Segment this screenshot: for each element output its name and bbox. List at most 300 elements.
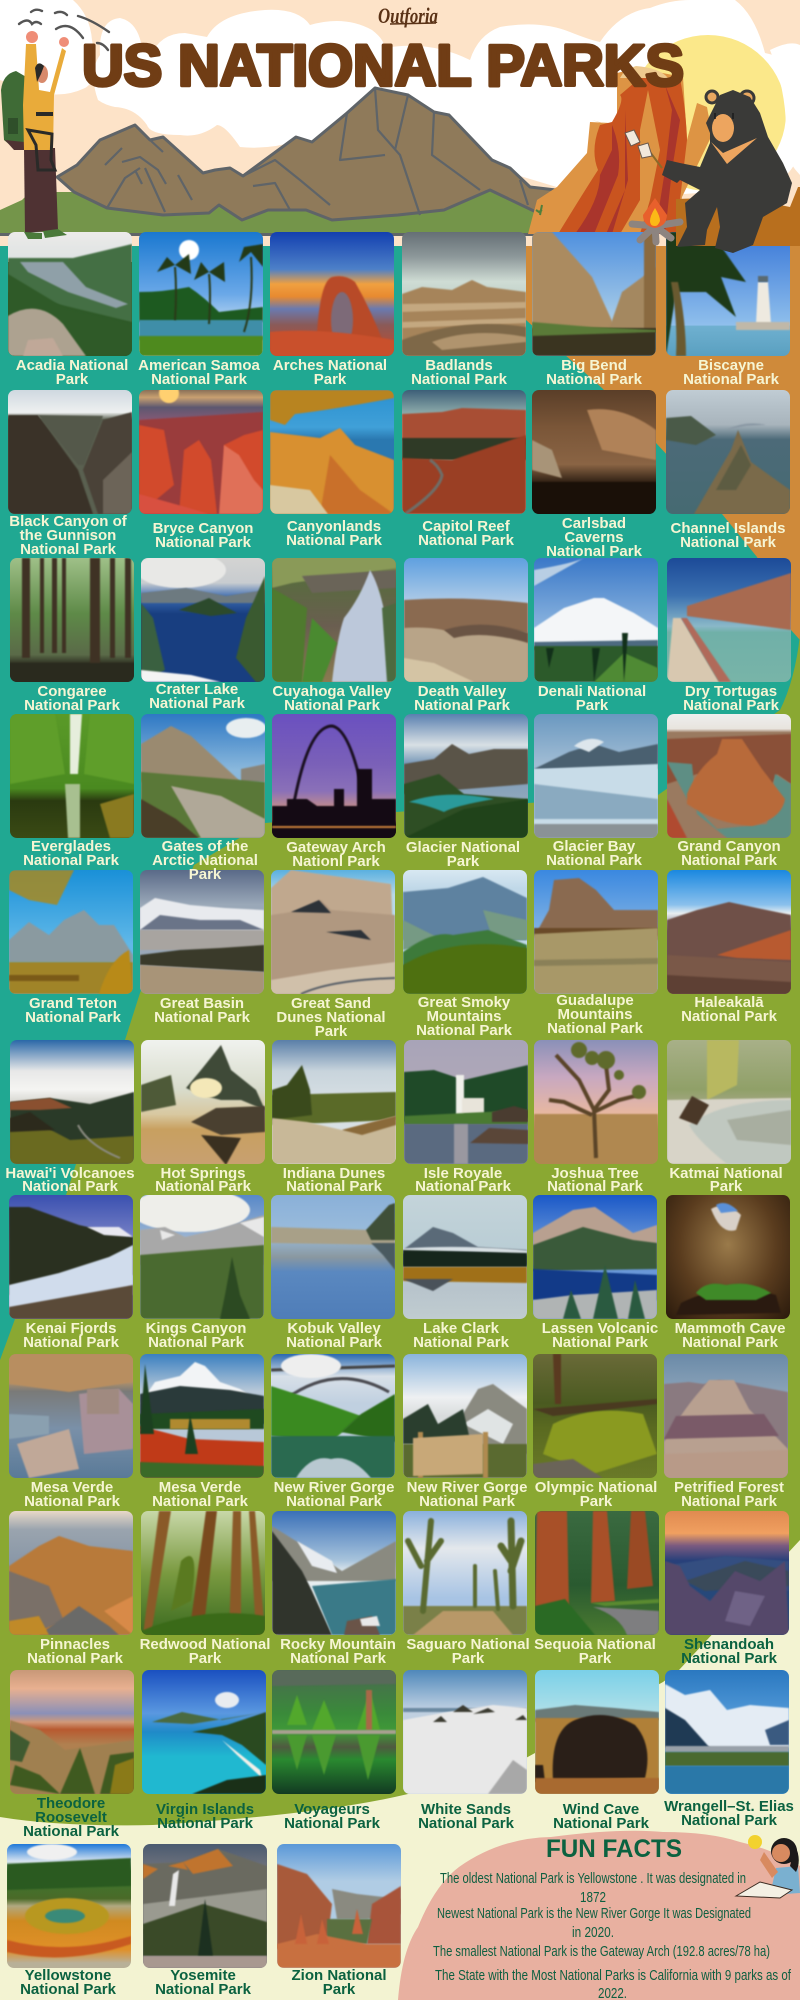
- card: Gates of the Arctic National Park: [141, 714, 265, 883]
- card: Pinnacles National Park: [9, 1511, 133, 1663]
- photo: Kenai Fjords: [9, 1195, 133, 1319]
- name: Gateway Arch: [286, 839, 386, 856]
- name: Park: [189, 866, 221, 883]
- bear log: [676, 187, 800, 246]
- card: Glacier National Park: [404, 714, 528, 866]
- name: [273, 357, 387, 388]
- bear: [662, 90, 792, 253]
- name: Capitol Reef: [422, 518, 510, 535]
- photo: Grand Teton: [9, 870, 133, 994]
- name: [510, 1638, 680, 1666]
- photo: Congaree: [10, 558, 134, 682]
- card: Hot Springs National Park: [141, 1040, 265, 1192]
- photo: Arches: [270, 232, 394, 356]
- name: New River Gorge: [407, 1479, 527, 1496]
- photo: Mesa Verde peak: [140, 1354, 264, 1478]
- name: Theodore: [37, 1795, 105, 1812]
- card: Kings Canyon National Park: [140, 1195, 264, 1347]
- name: Guadalupe: [556, 992, 634, 1009]
- name: National Park: [284, 697, 380, 714]
- name: National Park: [157, 1815, 253, 1832]
- name: National Park: [20, 1981, 116, 1998]
- card: Big Bend National Park: [532, 232, 656, 388]
- name: Katmai National: [669, 1165, 783, 1182]
- card: Denali National Park: [534, 558, 658, 714]
- name: [378, 841, 548, 869]
- name: Acadia National: [16, 357, 128, 374]
- name: National Park: [155, 534, 251, 551]
- name: National Park: [681, 1493, 777, 1510]
- name: Wind Cave: [563, 1801, 639, 1818]
- photo: Wind Cave: [535, 1670, 659, 1794]
- photo: Kings Canyon: [140, 1195, 264, 1319]
- name: Isle Royale: [424, 1165, 502, 1182]
- name: [24, 683, 120, 714]
- name: [418, 518, 514, 549]
- name: [414, 683, 510, 714]
- name: American Samoa: [138, 357, 260, 374]
- photo: Big Bend: [532, 232, 656, 356]
- photo: Hawaii Volcanoes: [10, 1040, 134, 1164]
- name: National Park: [149, 695, 245, 712]
- card: Voyageurs National Park: [272, 1670, 396, 1822]
- photo: Indiana Dunes: [272, 1040, 396, 1164]
- name: Sequoia National: [534, 1636, 656, 1653]
- name: National Park: [154, 1009, 250, 1026]
- title: US NATIONAL PARKS: [82, 34, 684, 98]
- name: [546, 515, 642, 560]
- photo: Katmai: [667, 1040, 791, 1164]
- photo: Haleakala: [667, 870, 791, 994]
- photo: Capitol Reef: [402, 390, 526, 514]
- name: [411, 357, 507, 388]
- name: [115, 1481, 285, 1509]
- name: [378, 1167, 548, 1193]
- photo: Great Sand Dunes: [271, 870, 395, 994]
- name: Arctic National: [152, 852, 258, 869]
- card: Capitol Reef National Park: [402, 390, 526, 549]
- name: [16, 357, 128, 388]
- card: Bryce Canyon National Park: [139, 390, 263, 551]
- card: Rocky Mountain National Park: [272, 1511, 396, 1663]
- name: Glacier National: [406, 839, 520, 856]
- name: National Park: [416, 1022, 512, 1039]
- photo: Carlsbad: [532, 390, 656, 514]
- photo: Great Smoky: [403, 870, 527, 994]
- sun: [630, 35, 786, 191]
- card: Mesa Verde National Park (1): [9, 1354, 133, 1506]
- card: Haleakala National Park: [667, 870, 791, 1022]
- card: Carlsbad Caverns National Park: [532, 390, 656, 560]
- name: [120, 1638, 290, 1666]
- name: Nationl Park: [292, 853, 380, 870]
- card: Everglades National Park: [10, 714, 134, 869]
- photo: Badlands: [402, 232, 526, 356]
- name: National Park: [20, 541, 116, 558]
- fun facts text: [433, 1871, 792, 2000]
- name: [538, 683, 646, 714]
- photo: New River Gorge bridge: [271, 1354, 395, 1478]
- photo: Joshua Tree: [534, 1040, 658, 1164]
- card: New River Gorge National Park: [271, 1354, 395, 1506]
- card: Canyonlands National Park: [270, 390, 394, 549]
- name: Cuyahoga Valley: [272, 683, 392, 700]
- name: National Park: [290, 1650, 386, 1667]
- card: Black Canyon of the Gunnison National Park: [8, 390, 132, 558]
- card: Hawai'i Volcanoes National Park: [10, 1040, 134, 1192]
- name: National Park: [286, 1334, 382, 1351]
- name: National Park: [683, 697, 779, 714]
- name: [644, 996, 800, 1024]
- card: Katmai National Park: [667, 1040, 791, 1192]
- card: Gateway Arch National Park: [272, 714, 396, 866]
- card: Mammoth Cave National Park: [666, 1195, 790, 1347]
- card: Olympic National Park: [533, 1354, 657, 1506]
- card: Glacier Bay National Park: [534, 714, 658, 866]
- name: Mountains: [426, 1008, 502, 1025]
- name: National Park: [681, 1008, 777, 1025]
- photo: Lake Clark: [403, 1195, 527, 1319]
- card: Sequoia National Park: [535, 1511, 659, 1663]
- name: Mammoth Cave: [675, 1320, 785, 1337]
- name: Park: [579, 1650, 611, 1667]
- name: [0, 1797, 156, 1839]
- card: Guadalupe Mountains National Park: [534, 870, 658, 1022]
- name: [670, 520, 786, 551]
- photo: Bryce: [139, 390, 263, 514]
- name: National Park: [23, 1334, 119, 1351]
- name: National Park: [24, 697, 120, 714]
- photo: Wrangell: [665, 1670, 789, 1794]
- name: [9, 513, 127, 558]
- photo: Redwood: [141, 1511, 265, 1635]
- name: [118, 1969, 288, 1997]
- name: Black Canyon of: [9, 513, 127, 530]
- name: Grand Teton: [29, 995, 117, 1012]
- name: Park: [576, 697, 608, 714]
- hero heading layer: [0, 0, 800, 100]
- card: Arches National Park: [270, 232, 394, 388]
- card: Lake Clark National Park: [403, 1195, 527, 1347]
- heading: fun facts: FUN FACTS: [546, 1835, 682, 1863]
- name: Dunes National: [276, 1009, 386, 1026]
- card: Crater Lake National Park: [141, 558, 265, 712]
- name: National Park: [286, 532, 382, 549]
- name: National Park: [23, 1823, 119, 1840]
- clouds: [0, 0, 800, 200]
- name: Mesa Verde: [31, 1479, 113, 1496]
- name: [382, 1481, 552, 1509]
- photo: Isle Royale: [404, 1040, 528, 1164]
- name: Joshua Tree: [551, 1165, 639, 1182]
- rock formation: [528, 66, 712, 234]
- name: [644, 1481, 800, 1509]
- photo: Guadalupe: [534, 870, 658, 994]
- name: Park: [323, 1981, 355, 1998]
- photo: Hot Springs: [141, 1040, 265, 1164]
- name: [644, 840, 800, 868]
- name: [376, 1322, 546, 1350]
- photo: Petrified Forest: [664, 1354, 788, 1478]
- marshmallows on stick: [625, 130, 662, 168]
- photo: Kobuk Valley: [271, 1195, 395, 1319]
- name: Olympic National: [535, 1479, 657, 1496]
- photo: American Samoa: [139, 232, 263, 356]
- name: Voyageurs: [294, 1801, 370, 1818]
- photo: Virgin Islands: [142, 1670, 266, 1794]
- photo: Sequoia: [535, 1511, 659, 1635]
- card: Great Basin National Park: [140, 870, 264, 1022]
- name: Death Valley: [418, 683, 506, 700]
- name: [515, 1322, 685, 1350]
- name: [249, 1322, 419, 1350]
- card: Great Smoky Mountains National Park: [403, 870, 527, 1022]
- card: Lassen Volcanic National Park: [533, 1195, 657, 1347]
- photo: Mesa Verde ruins: [9, 1354, 133, 1478]
- name: National Park: [415, 1178, 511, 1195]
- name: Rocky Mountain: [280, 1636, 396, 1653]
- name: [118, 1167, 288, 1193]
- name: Channel Islands: [670, 520, 786, 537]
- name: Park: [447, 853, 479, 870]
- name: [286, 518, 382, 549]
- foreground: hiker, bear, campfire: [0, 0, 800, 270]
- name: Great Smoky: [418, 994, 510, 1011]
- name: [644, 1800, 800, 1828]
- name: [383, 1638, 553, 1666]
- name: [153, 520, 253, 551]
- name: Canyonlands: [287, 518, 381, 535]
- photo: Channel Islands: [666, 390, 790, 514]
- name: National Park: [681, 1812, 777, 1829]
- name: Park: [452, 1650, 484, 1667]
- name: [149, 681, 245, 712]
- photo: Great Basin: [140, 870, 264, 994]
- name: Yosemite: [170, 1967, 236, 1984]
- name: National Park: [552, 1334, 648, 1351]
- card: Petrified Forest National Park: [664, 1354, 788, 1506]
- name: Shenandoah: [684, 1636, 774, 1653]
- name: Hawai'i Volcanoes: [5, 1165, 135, 1182]
- name: Park: [580, 1493, 612, 1510]
- name: Mountains: [558, 1006, 632, 1023]
- card: Channel Islands National Park: [666, 390, 790, 551]
- photo: Shenandoah: [665, 1511, 789, 1635]
- name: National Park: [413, 1334, 509, 1351]
- name: Carlsbad: [562, 515, 626, 532]
- name: [510, 994, 680, 1036]
- card: Grand Canyon National Park: [667, 714, 791, 866]
- photo: Death Valley: [404, 558, 528, 682]
- name: National Park: [418, 532, 514, 549]
- card: Grand Teton National Park: [9, 870, 133, 1022]
- name: Park: [314, 371, 346, 388]
- card: Dry Tortugas National Park: [667, 558, 791, 714]
- card: American Samoa National Park: [138, 232, 263, 388]
- mountains: [57, 88, 556, 220]
- ground: [0, 190, 570, 234]
- name: [0, 1322, 156, 1350]
- photo: Gateway Arch: [272, 714, 396, 838]
- card: Kenai Fjords National Park: [9, 1195, 133, 1347]
- name: [511, 1481, 681, 1509]
- name: [0, 1167, 155, 1193]
- card: Cuyahoga Valley National Park: [272, 558, 396, 714]
- fun facts text: 1872: [580, 1890, 606, 1906]
- name: [379, 996, 549, 1038]
- name: National Park: [547, 1178, 643, 1195]
- card: Virgin Islands National Park: [142, 1670, 266, 1822]
- name: Everglades: [31, 838, 111, 855]
- photo: Biscayne: [666, 232, 790, 356]
- card: Shenandoah National Park: [665, 1511, 789, 1663]
- name: Big Bend: [561, 357, 627, 374]
- name: Redwood National: [140, 1636, 270, 1653]
- card: Death Valley National Park: [404, 558, 528, 714]
- name: New River Gorge: [274, 1479, 394, 1496]
- fun facts text: in 2020.: [572, 1925, 614, 1941]
- name: National Park: [25, 1009, 121, 1026]
- name: Haleakalā: [694, 994, 764, 1011]
- name: [683, 357, 779, 388]
- card: White Sands National Park: [403, 1670, 527, 1822]
- name: [120, 840, 290, 882]
- name: Arches National: [273, 357, 387, 374]
- name: [381, 1803, 551, 1831]
- name: National Park: [681, 1650, 777, 1667]
- photo: Yosemite: [143, 1844, 267, 1968]
- name: [247, 1803, 417, 1831]
- name: National Park: [155, 1981, 251, 1998]
- name: Bryce Canyon: [153, 520, 253, 537]
- photo: Yellowstone: [7, 1844, 131, 1968]
- name: National Park: [23, 852, 119, 869]
- photo: Canyonlands: [270, 390, 394, 514]
- name: [0, 1481, 157, 1509]
- hero scenery: clouds, sun, mountains, rocks: [0, 0, 800, 236]
- name: [510, 1167, 680, 1193]
- name: [249, 1481, 419, 1509]
- name: Biscayne: [698, 357, 764, 374]
- name: Mesa Verde: [159, 1479, 241, 1496]
- name: [251, 841, 421, 869]
- card: Isle Royale National Park: [404, 1040, 528, 1192]
- name: Lake Clark: [423, 1320, 499, 1337]
- name: Great Basin: [160, 995, 244, 1012]
- name: Dry Tortugas: [685, 683, 777, 700]
- hiker: [1, 31, 69, 239]
- photo: Everglades: [10, 714, 134, 838]
- name: [111, 1322, 281, 1350]
- name: Badlands: [425, 357, 493, 374]
- card: New River Gorge National Park (sign): [403, 1354, 527, 1506]
- card: Wrangell-St. Elias National Park: [665, 1670, 789, 1822]
- photo: Lassen: [533, 1195, 657, 1319]
- photo: Theodore Roosevelt: [10, 1670, 134, 1794]
- name: [138, 357, 260, 388]
- name: Great Sand: [291, 995, 371, 1012]
- photo: Black Canyon: [8, 390, 132, 514]
- name: Park: [56, 371, 88, 388]
- name: [246, 997, 416, 1039]
- name: National Park: [546, 852, 642, 869]
- name: National Park: [547, 1020, 643, 1037]
- name: National Park: [286, 1178, 382, 1195]
- photo: Olympic: [533, 1354, 657, 1478]
- card: Saguaro National Park: [403, 1511, 527, 1663]
- photo: Mammoth Cave: [666, 1195, 790, 1319]
- photo: Gates of the Arctic: [141, 714, 265, 838]
- name: Park: [315, 1023, 347, 1040]
- photo: Voyageurs: [272, 1670, 396, 1794]
- name: Denali National: [538, 683, 646, 700]
- card: Redwood National Park: [141, 1511, 265, 1663]
- photo: Grand Canyon: [667, 714, 791, 838]
- name: National Park: [414, 697, 510, 714]
- name: [254, 1969, 424, 1997]
- logo: Outforia: Outforia: [378, 3, 438, 28]
- name: National Park: [419, 1493, 515, 1510]
- name: [117, 997, 287, 1025]
- name: Pinnacles: [40, 1636, 110, 1653]
- card: Kobuk Valley National Park: [271, 1195, 395, 1347]
- name: [0, 1969, 153, 1997]
- card: Great Sand Dunes National Park: [271, 870, 395, 1022]
- name: Glacier Bay: [553, 838, 635, 855]
- name: National Park: [546, 371, 642, 388]
- name: [0, 1638, 160, 1666]
- photo: Rocky Mountain: [272, 1511, 396, 1635]
- cloud top right: [770, 43, 800, 175]
- name: [509, 840, 679, 868]
- name: [120, 1803, 290, 1831]
- name: [644, 1638, 800, 1666]
- name: Kobuk Valley: [287, 1320, 381, 1337]
- name: Gates of the: [162, 838, 248, 855]
- name: Zion National: [292, 1967, 386, 1984]
- name: [249, 1167, 419, 1193]
- name: National Park: [151, 371, 247, 388]
- photo: Saguaro: [403, 1511, 527, 1635]
- name: [546, 357, 642, 388]
- name: Caverns: [564, 529, 624, 546]
- name: National Park: [27, 1650, 123, 1667]
- name: Saguaro National: [406, 1636, 530, 1653]
- card: Joshua Tree National Park: [534, 1040, 658, 1192]
- name: National Park: [286, 1493, 382, 1510]
- photo: Crater Lake: [141, 558, 265, 682]
- card: Badlands National Park: [402, 232, 526, 388]
- campfire: [632, 198, 680, 242]
- card: Theodore Roosevelt National Park: [10, 1670, 134, 1822]
- name: National Park: [411, 371, 507, 388]
- card: Acadia National Park: [8, 232, 132, 388]
- name: National Park: [680, 534, 776, 551]
- name: Wrangell–St. Elias: [664, 1798, 794, 1815]
- name: National Park: [553, 1815, 649, 1832]
- card: Yellowstone National Park: [7, 1844, 131, 1996]
- photo: boundary sign: [403, 1354, 527, 1478]
- birds: [19, 10, 109, 50]
- name: National Park: [682, 1334, 778, 1351]
- name: [645, 1322, 800, 1350]
- name: [516, 1803, 686, 1831]
- name: [683, 683, 779, 714]
- name: National Park: [24, 1493, 120, 1510]
- card: Congaree National Park: [10, 558, 134, 714]
- name: National Park: [148, 1334, 244, 1351]
- card: Indiana Dunes National Park: [272, 1040, 396, 1192]
